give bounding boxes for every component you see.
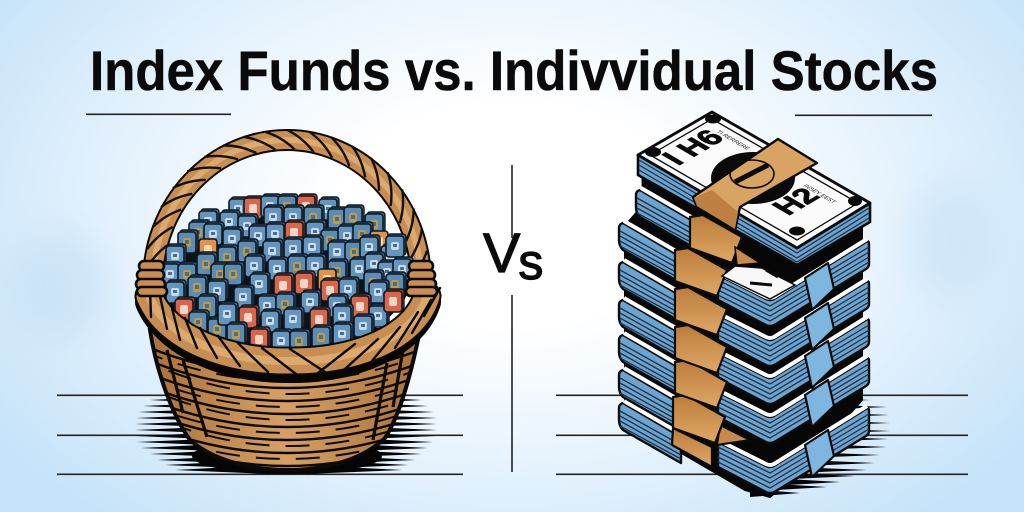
top bundle note face bbox=[638, 112, 870, 248]
note centre medallion bbox=[711, 152, 795, 204]
stack of cash illustration bbox=[619, 112, 890, 497]
right handle coil bbox=[406, 261, 437, 296]
stock tiles filling the basket bbox=[161, 194, 413, 352]
bottom paper band bbox=[672, 428, 712, 467]
note small print left: TI RERRERE bbox=[714, 130, 751, 151]
basket front rope rim bbox=[149, 288, 440, 374]
note serial right: H2 bbox=[766, 184, 827, 220]
versus label: V bbox=[483, 221, 520, 284]
band seal bbox=[730, 160, 774, 188]
versus label: s bbox=[518, 234, 543, 290]
lower bundles left sides bbox=[619, 188, 698, 463]
top bundle paper band bbox=[693, 139, 817, 230]
top bundle side bbox=[638, 155, 870, 265]
background texture: left bbox=[10, 230, 110, 340]
stack ground shadow bbox=[750, 396, 890, 497]
torn band flap bbox=[717, 425, 750, 445]
note inner frame bbox=[650, 119, 858, 240]
title underline right bbox=[795, 114, 932, 116]
top cash bundle bbox=[638, 112, 870, 265]
left handle coil bbox=[136, 261, 167, 296]
basket handle bbox=[145, 130, 429, 282]
title: Index Funds vs. Indivvidual Stocks bbox=[90, 39, 938, 102]
note corner ornaments bbox=[645, 114, 862, 236]
note serial left: I H6 bbox=[656, 125, 731, 170]
left ground lines bbox=[57, 394, 463, 475]
basket illustration bbox=[135, 130, 440, 474]
divider vertical line bbox=[511, 165, 513, 472]
stack black backing bbox=[625, 116, 862, 497]
top bundle side stripes bbox=[639, 160, 869, 262]
lower bundles right sides bbox=[718, 239, 869, 493]
exposed note under top bundle bbox=[722, 247, 795, 299]
right ground lines bbox=[556, 394, 968, 475]
basket ground shadow bbox=[135, 396, 437, 474]
lower tan bands bbox=[673, 215, 742, 443]
background texture: right bbox=[905, 180, 995, 300]
basket woven body bbox=[140, 330, 435, 470]
note small print right: INSEY EEST bbox=[801, 184, 837, 205]
title underline left bbox=[86, 114, 231, 115]
band lower shading bbox=[694, 190, 738, 229]
basket interior bbox=[158, 203, 412, 358]
